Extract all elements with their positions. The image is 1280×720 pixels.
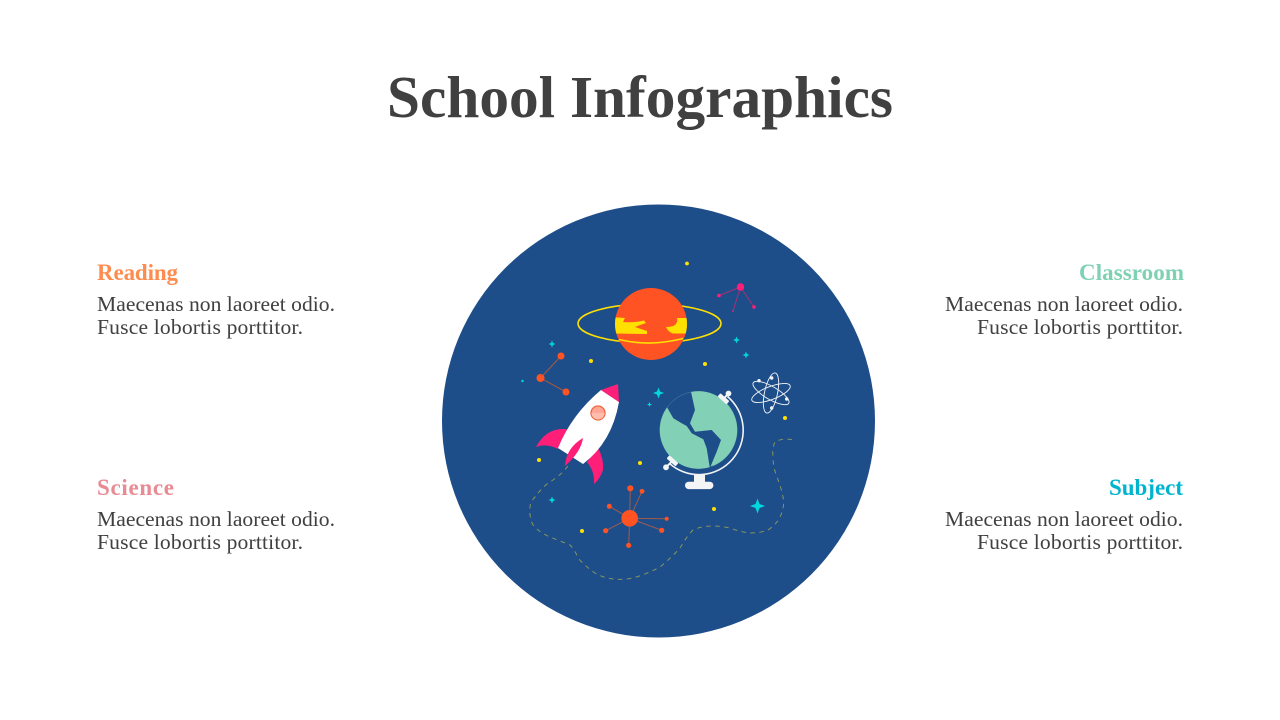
panel: reading xyxy=(97,260,335,339)
cyan sparkles xyxy=(521,336,765,514)
icon: pink constellation xyxy=(717,283,756,312)
text block: classroom: Maecenas non laoreet odio. xyxy=(945,292,1183,316)
heading: classroom: Classroom xyxy=(1079,260,1184,285)
yellow star dots xyxy=(537,262,787,533)
text block: science xyxy=(97,507,335,554)
text block: subject: Maecenas non laoreet odio. xyxy=(945,507,1183,531)
text block: reading: Fusce lobortis porttitor. xyxy=(97,315,303,339)
central illustration: space circle xyxy=(442,204,875,638)
heading: reading: Reading xyxy=(97,260,178,285)
panel: classroom xyxy=(945,260,1184,339)
text block: subject: Fusce lobortis porttitor. xyxy=(977,530,1183,554)
text block: classroom: Fusce lobortis porttitor. xyxy=(977,315,1183,339)
icon: atom xyxy=(750,372,792,414)
text block: science: Maecenas non laoreet odio. xyxy=(97,507,335,531)
background circle xyxy=(442,204,875,638)
icon: orange constellation xyxy=(536,352,570,396)
text block: science: Fusce lobortis porttitor. xyxy=(97,530,303,554)
title: School Infographics xyxy=(387,64,893,130)
text block: subject xyxy=(945,507,1183,554)
text block: reading xyxy=(97,292,335,339)
heading: subject: Subject xyxy=(1109,475,1183,500)
heading: science: Science xyxy=(97,475,174,500)
dashed flight path xyxy=(530,439,796,579)
icon: molecule xyxy=(603,485,669,548)
icon: desk globe xyxy=(660,390,744,490)
text block: reading: Maecenas non laoreet odio. xyxy=(97,292,335,316)
panel: science xyxy=(97,475,335,554)
icon: ringed planet xyxy=(578,288,721,360)
panel: subject xyxy=(945,475,1183,554)
icon: rocket xyxy=(536,384,619,484)
text block: classroom xyxy=(945,292,1183,339)
